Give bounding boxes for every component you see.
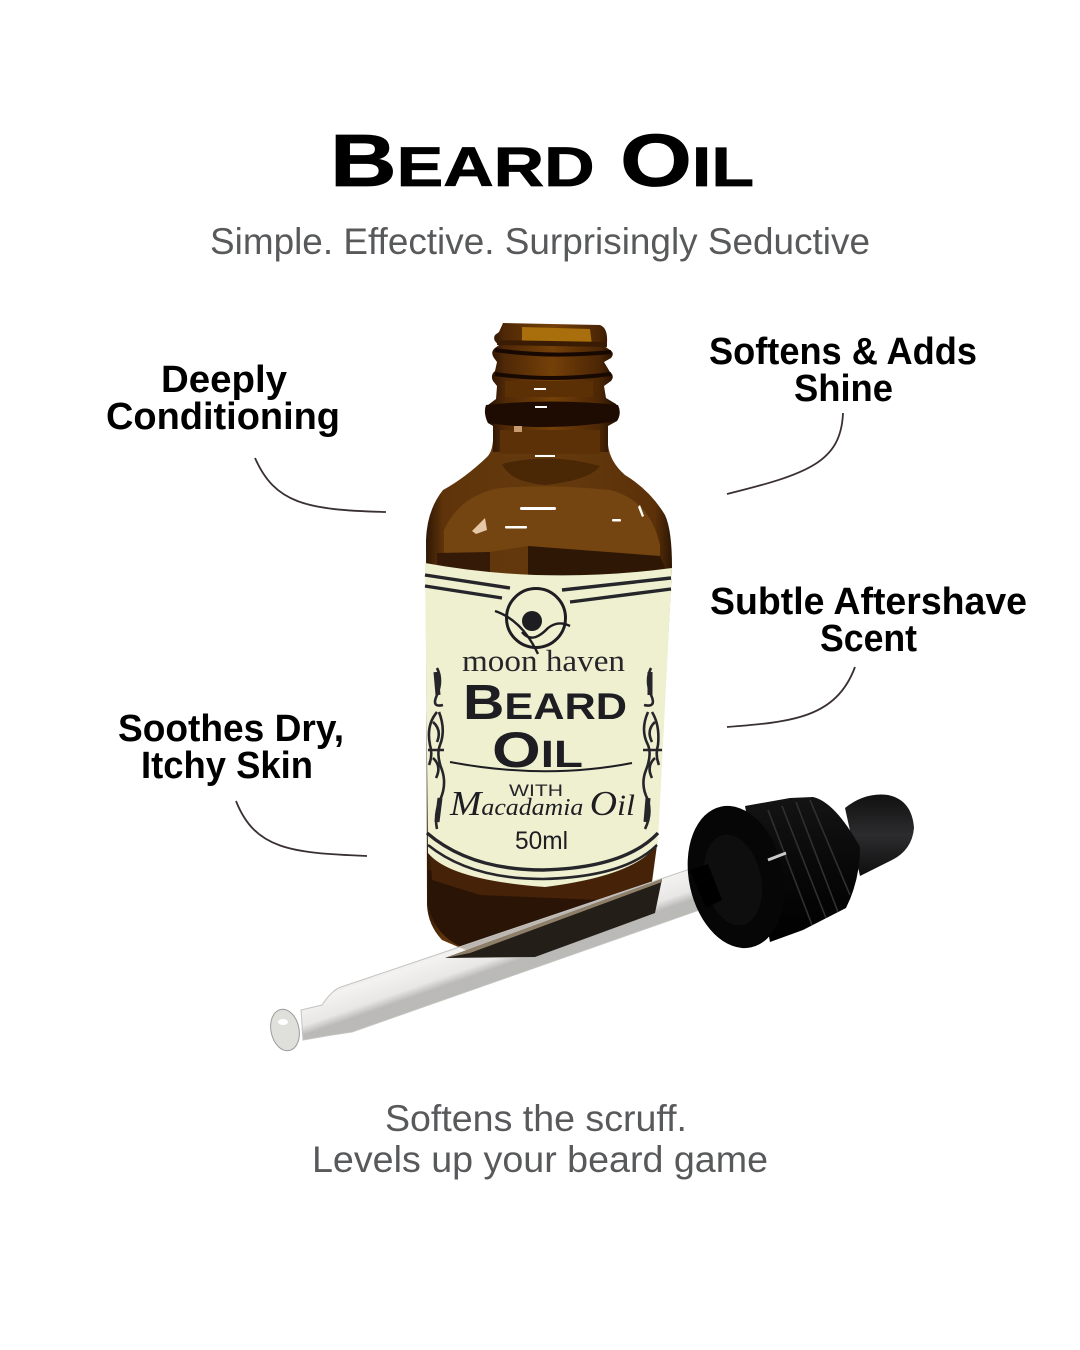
product name beard: BEARD: [463, 676, 627, 730]
volume: 50ml: [515, 827, 568, 855]
left ornament: [428, 668, 444, 829]
shoulder pocket: [502, 458, 600, 485]
leader line: subtle aftershave scent: [727, 667, 855, 727]
label: deeply conditioning: [106, 359, 340, 438]
bottle body silhouette: [426, 432, 672, 952]
top label stripes: [425, 575, 671, 602]
label: soothes dry itchy skin: [118, 708, 344, 787]
reflection in pipette: [445, 879, 662, 958]
dropper: [267, 795, 914, 1053]
glass pipette: [301, 868, 708, 1040]
closing tagline: Levels up your beard game: [312, 1139, 768, 1180]
with: WITH: [509, 781, 563, 800]
label paper: [425, 563, 672, 887]
dark liquid band: [528, 546, 668, 582]
glass highlights: [472, 388, 644, 534]
label: softens and adds shine: Shine: [794, 368, 893, 410]
closing tagline: [312, 1098, 768, 1180]
label: subtle aftershave scent: Scent: [820, 618, 917, 660]
lower bottle dark base: [428, 860, 650, 950]
label: softens and adds shine: Softens & Adds: [709, 331, 977, 373]
label: soothes dry itchy skin: Itchy Skin: [141, 745, 313, 787]
label: soothes dry itchy skin: Soothes Dry,: [118, 708, 344, 750]
pipette entry into cap: [690, 864, 722, 908]
ribbed collar: [745, 797, 860, 942]
label: subtle aftershave scent: [710, 581, 1027, 660]
glass ball tip: [267, 1007, 303, 1053]
inner lighter glass area: [444, 486, 660, 560]
macadamia oil: Macadamia Oil: [449, 784, 635, 823]
brand name: moon haven: [462, 643, 626, 678]
subtitle: Simple. Effective. Surprisingly Seductive: [210, 221, 870, 262]
neck inner glow: [522, 327, 592, 345]
dropper bulb: [845, 795, 914, 876]
label: deeply conditioning: Deeply: [161, 359, 287, 401]
title: BEARD O IL: [330, 119, 754, 202]
label: softens and adds shine: [709, 331, 977, 410]
cap highlight: [768, 853, 786, 860]
neck dark rings: [495, 350, 611, 378]
leader line: deeply conditioning: [255, 458, 386, 512]
closing tagline: Softens the scruff.: [385, 1098, 687, 1139]
cap face: [675, 797, 797, 957]
divider under name: [450, 762, 632, 771]
right ornament: [643, 668, 662, 829]
label: deeply conditioning: Conditioning: [106, 396, 340, 438]
bottle: [426, 323, 672, 952]
bottom label stripes: [427, 833, 658, 879]
label: [425, 563, 672, 887]
leader line: softens and adds shine: [727, 413, 843, 494]
leader line: soothes dry itchy skin: [236, 801, 367, 856]
logo: [495, 588, 570, 654]
label: subtle aftershave scent: Subtle Aftershave: [710, 581, 1027, 623]
bottle neck and threads: [486, 323, 619, 452]
product name oil: O IL: [492, 722, 583, 778]
